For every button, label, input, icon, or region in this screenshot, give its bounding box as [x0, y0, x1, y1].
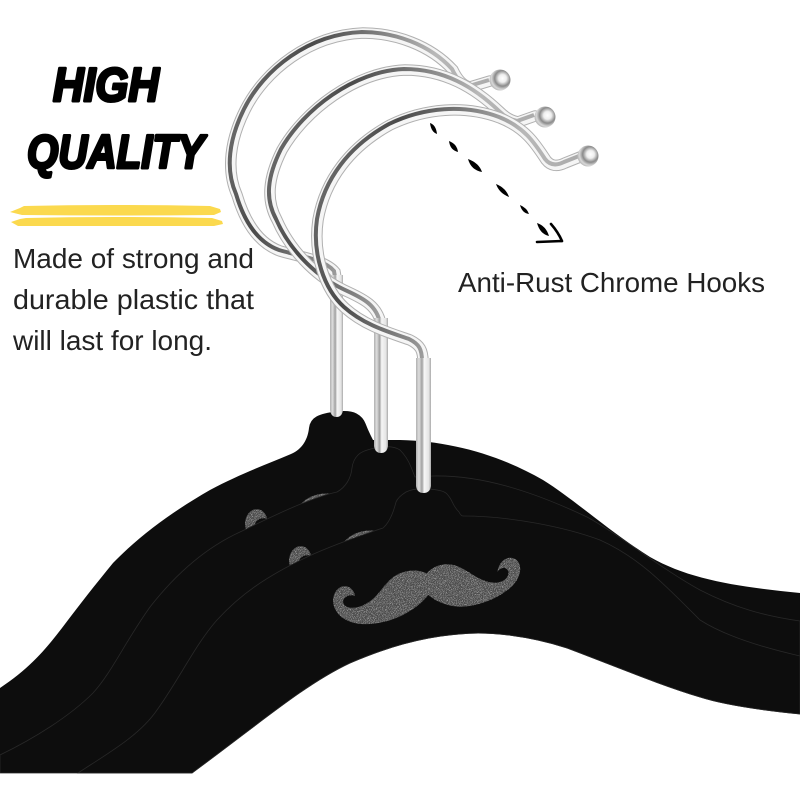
description text: durable plastic that: [13, 284, 254, 315]
middle hook shaft: [374, 318, 388, 453]
back hook shaft: [330, 275, 343, 417]
back hanger moustache: [245, 481, 432, 547]
description text: will last for long.: [12, 325, 212, 356]
front hanger: [78, 489, 800, 773]
front hanger moustache: [333, 558, 520, 624]
middle hook ball: [534, 106, 556, 128]
back hook ball: [490, 70, 510, 90]
front hook: [316, 109, 598, 493]
dashed arrow: [430, 123, 562, 242]
middle hanger: [0, 447, 800, 773]
back hanger: [0, 411, 800, 773]
title: High Quality: [27, 58, 207, 178]
description text: [12, 243, 254, 356]
yellow brush underline: [10, 205, 223, 226]
front hook shaft: [416, 358, 431, 493]
middle hanger moustache: [289, 518, 476, 584]
front hook ball: [578, 146, 598, 166]
callout: anti-rust chrome hooks: Anti-Rust Chrome Hooks: [458, 267, 765, 298]
middle hook: [269, 69, 556, 453]
title: High Quality: QUALITY: [27, 125, 207, 178]
back hook: [230, 32, 510, 417]
description text: Made of strong and: [13, 243, 254, 274]
title: High Quality: HIGH: [53, 58, 160, 111]
